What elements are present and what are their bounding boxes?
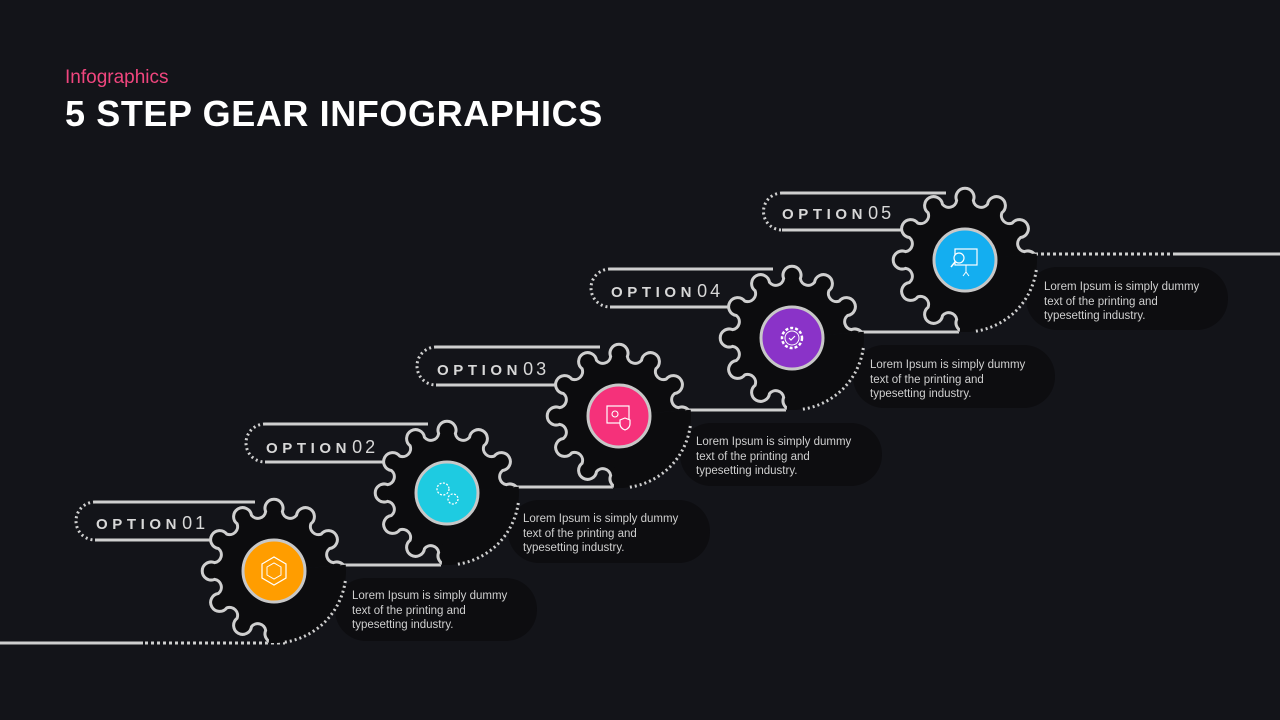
step 2	[246, 421, 710, 565]
baseline left	[0, 642, 285, 644]
label 5: OPTION05	[782, 203, 894, 223]
text box 4: typesetting industry.	[870, 388, 971, 400]
text box 2: Lorem Ipsum is simply dummy	[523, 513, 679, 525]
text box 5: typesetting industry.	[1044, 310, 1145, 322]
gear 4	[720, 266, 864, 410]
label 1: OPTION01	[96, 513, 208, 533]
text box 1	[335, 578, 537, 641]
label 1	[76, 502, 255, 540]
step 1	[76, 499, 537, 643]
gear 2	[375, 421, 519, 565]
subtitle: Infographics	[65, 67, 169, 88]
text box 3: typesetting industry.	[696, 465, 797, 477]
gear 5	[893, 188, 1037, 332]
text box 1: typesetting industry.	[352, 619, 453, 631]
label 4	[591, 269, 773, 307]
gear 3	[547, 344, 691, 488]
gear 1	[202, 499, 346, 643]
text box 1: Lorem Ipsum is simply dummy	[352, 590, 508, 602]
text box 5	[1026, 267, 1228, 330]
connector lines	[340, 332, 959, 565]
baseline right	[1035, 252, 1280, 256]
text box 3	[680, 423, 882, 486]
title: 5 STEP GEAR INFOGRAPHICS	[65, 93, 603, 134]
step 4	[591, 266, 1055, 410]
text box 4: text of the printing and	[870, 374, 984, 386]
text box 4	[853, 345, 1055, 408]
label 2	[246, 424, 428, 462]
label 3: OPTION03	[437, 359, 549, 379]
label 5	[764, 193, 946, 230]
label 4: OPTION04	[611, 281, 723, 301]
text box 3: Lorem Ipsum is simply dummy	[696, 436, 852, 448]
step 3	[417, 344, 882, 488]
label 3	[417, 347, 600, 385]
text box 5: Lorem Ipsum is simply dummy	[1044, 281, 1200, 293]
text box 2: typesetting industry.	[523, 542, 624, 554]
text box 1: text of the printing and	[352, 605, 466, 617]
step 5	[764, 188, 1228, 332]
text box 4: Lorem Ipsum is simply dummy	[870, 359, 1026, 371]
label 2: OPTION02	[266, 437, 378, 457]
text box 2	[508, 500, 710, 563]
text box 5: text of the printing and	[1044, 296, 1158, 308]
text box 3: text of the printing and	[696, 451, 810, 463]
text box 2: text of the printing and	[523, 528, 637, 540]
